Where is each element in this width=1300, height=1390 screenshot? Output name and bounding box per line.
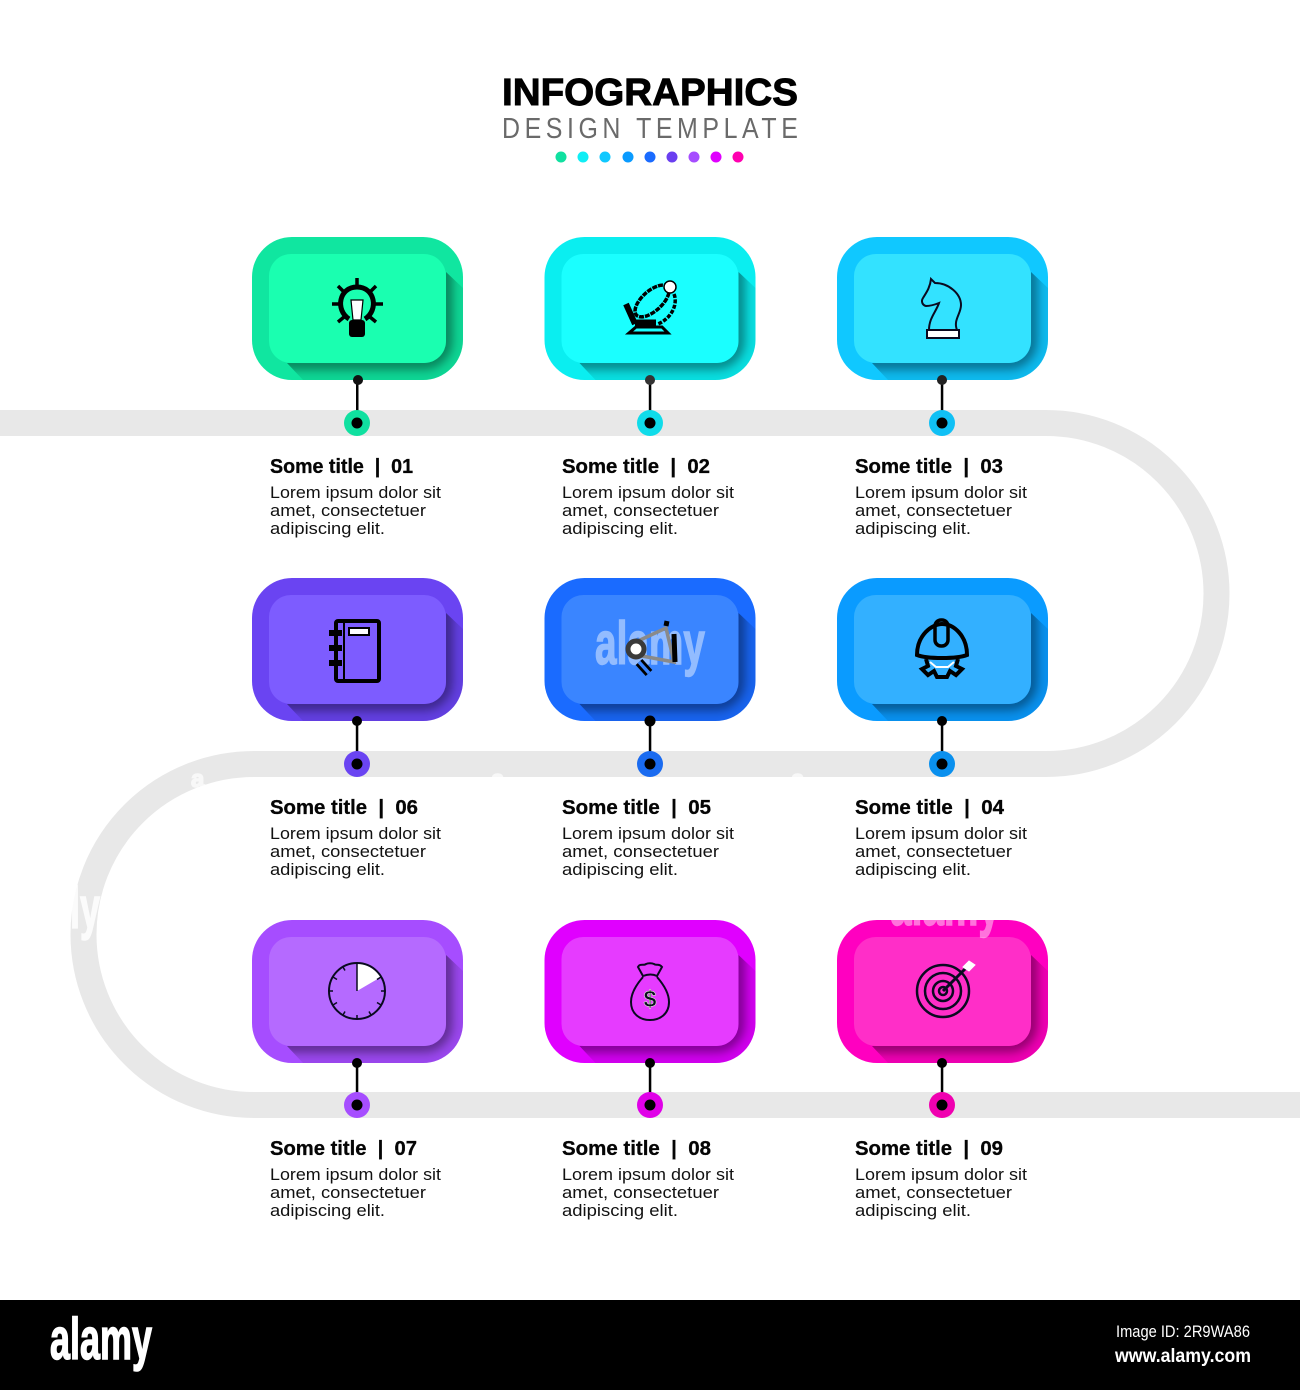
heading 02: Some title | 02: [562, 456, 710, 478]
heading 03: Some title | 03: [855, 456, 1003, 478]
text 06: adipiscing elit.: [270, 861, 385, 879]
text 05: adipiscing elit.: [562, 861, 678, 879]
connector 09: [929, 1058, 955, 1118]
watermark fragments on track: a: [1091, 766, 1105, 793]
icon: microscope: [626, 280, 676, 333]
text 03: amet, consectetuer: [855, 502, 1013, 520]
text 08: [562, 1166, 734, 1220]
text 03: [855, 484, 1027, 538]
panel: step 07: [252, 920, 463, 1220]
watermark on card 05: alamy: [595, 610, 705, 677]
heading 05: Some title | 05: [562, 797, 711, 819]
text 05: amet, consectetuer: [562, 843, 720, 861]
footer logo: alamy: [50, 1307, 152, 1372]
heading 08: Some title | 08: [562, 1138, 711, 1160]
subtitle: DESIGN TEMPLATE: [502, 112, 798, 144]
text 02: adipiscing elit.: [562, 520, 678, 538]
card 07: [252, 920, 463, 1063]
colour dots row: [556, 152, 744, 162]
title: INFOGRAPHICS: [502, 72, 798, 114]
card 08: [544, 920, 756, 1063]
text 06: [270, 825, 441, 879]
icon: chess knight: [922, 279, 961, 338]
text 05: Lorem ipsum dolor sit: [562, 825, 734, 843]
heading 04: Some title | 04: [855, 797, 1005, 819]
panel: step 03: [837, 237, 1048, 538]
connector 06: [344, 716, 370, 777]
text 09: [855, 1166, 1027, 1220]
text 01: amet, consectetuer: [270, 502, 427, 520]
text 09: amet, consectetuer: [855, 1184, 1013, 1202]
connector 04: [929, 716, 955, 777]
watermark fragments on track: [70, 766, 1105, 941]
panel: step 09: [837, 920, 1048, 1220]
icon: megaphone: [628, 621, 675, 673]
card 03: [837, 237, 1048, 380]
text 01: Lorem ipsum dolor sit: [270, 484, 441, 502]
icon: light bulb: [332, 278, 383, 337]
text 02: [562, 484, 734, 538]
text 02: Lorem ipsum dolor sit: [562, 484, 734, 502]
winding grey track: [0, 423, 1300, 1105]
watermark fragments on track: a: [491, 766, 505, 793]
card 04: [837, 578, 1048, 721]
panel: step 05: [544, 578, 756, 879]
connector 01: [344, 375, 370, 436]
icon: notebook: [329, 621, 379, 681]
text 03: adipiscing elit.: [855, 520, 971, 538]
text 07: Lorem ipsum dolor sit: [270, 1166, 441, 1184]
text 07: adipiscing elit.: [270, 1202, 385, 1220]
text 04: amet, consectetuer: [855, 843, 1013, 861]
connector 03: [929, 375, 955, 436]
heading 06: Some title | 06: [270, 797, 418, 819]
footer bar: [0, 1300, 1300, 1390]
text 07: [270, 1166, 441, 1220]
card 05: [544, 578, 756, 721]
heading 07: Some title | 07: [270, 1138, 417, 1160]
watermark fragments on track: ly: [70, 876, 100, 941]
text 04: [855, 825, 1027, 879]
text 08: adipiscing elit.: [562, 1202, 678, 1220]
panel: step 02: [544, 237, 756, 538]
text 02: amet, consectetuer: [562, 502, 720, 520]
text 08: amet, consectetuer: [562, 1184, 720, 1202]
watermark on card 09: alamy: [890, 871, 1000, 938]
text 01: adipiscing elit.: [270, 520, 385, 538]
icon: helmet and gear: [917, 620, 967, 677]
heading 01: Some title | 01: [270, 456, 413, 478]
panel: step 04: [837, 578, 1048, 879]
image id: Image ID: 2R9WA86: [1116, 1322, 1250, 1341]
text 01: [270, 484, 441, 538]
connector 07: [344, 1058, 370, 1118]
card 09: [837, 920, 1048, 1063]
text 06: Lorem ipsum dolor sit: [270, 825, 441, 843]
watermark fragments on track: a: [191, 766, 205, 793]
text 04: Lorem ipsum dolor sit: [855, 825, 1027, 843]
site url: www.alamy.com: [1114, 1346, 1251, 1367]
text 08: Lorem ipsum dolor sit: [562, 1166, 734, 1184]
card 01: [252, 237, 463, 380]
watermark fragments on track: a: [791, 766, 805, 793]
connector 02: [637, 375, 663, 436]
text 05: [562, 825, 734, 879]
heading 09: Some title | 09: [855, 1138, 1003, 1160]
icon: clock: [329, 963, 385, 1019]
panel: step 08: [544, 920, 756, 1220]
panel: step 06: [252, 578, 463, 879]
connector 08: [637, 1058, 663, 1118]
text 09: adipiscing elit.: [855, 1202, 971, 1220]
text 06: amet, consectetuer: [270, 843, 427, 861]
panel: step 01: [252, 237, 463, 538]
card 06: [252, 578, 463, 721]
text 04: adipiscing elit.: [855, 861, 971, 879]
icon: target with arrow: [917, 961, 975, 1017]
text 07: amet, consectetuer: [270, 1184, 427, 1202]
icon: money bag: [631, 963, 669, 1020]
card 02: [544, 237, 756, 380]
text 03: Lorem ipsum dolor sit: [855, 484, 1027, 502]
connector 05: [637, 716, 663, 777]
icon: money bag: $: [644, 986, 657, 1012]
text 09: Lorem ipsum dolor sit: [855, 1166, 1027, 1184]
